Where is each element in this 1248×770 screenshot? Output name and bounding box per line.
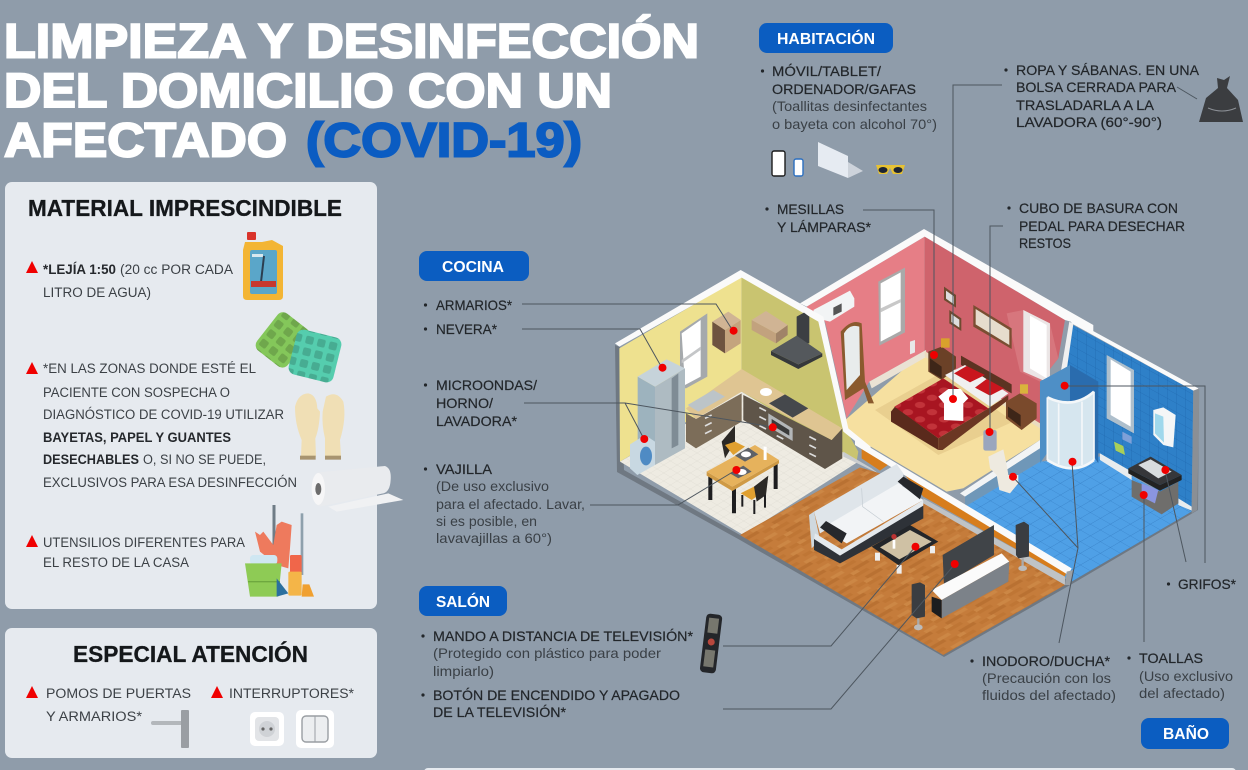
- text: móvil, tablet: MÓVIL/TABLET/: [772, 63, 881, 79]
- text: armarios y nevera: [424, 297, 513, 337]
- rug: [875, 372, 1013, 455]
- text: inodoro y ducha: [970, 653, 1116, 703]
- windows: [878, 268, 905, 346]
- title: LIMPIEZA Y DESINFECCIÓN: [4, 14, 699, 68]
- text: toallas: (Uso exclusivo: [1139, 668, 1233, 684]
- text: inodoro y ducha: (Precaución con los: [982, 670, 1111, 686]
- icon: cleaning kit: [245, 505, 314, 597]
- text: toallas: [1127, 650, 1233, 701]
- shower: [1040, 365, 1070, 463]
- text: cubo de basura: PEDAL PARA DESECHAR: [1019, 218, 1185, 234]
- room: kitchen: [615, 270, 871, 535]
- text: utensilios: UTENSILIOS DIFERENTES PARA: [43, 535, 245, 550]
- text: vajilla: VAJILLA: [436, 461, 493, 477]
- icon: devices: [772, 142, 905, 178]
- room: bedroom: [800, 229, 1093, 492]
- text: zonas del paciente: DIAGNÓSTICO DE COVID-19 UTILIZAR: [43, 407, 284, 422]
- panel: especial atención: [5, 628, 377, 758]
- text: lejía: LITRO DE AGUA): [43, 285, 151, 300]
- text: mando a distancia: limpiarlo): [433, 663, 494, 679]
- waste bin: [983, 430, 997, 451]
- title: [4, 14, 699, 168]
- text: ropa y sábanas: LAVADORA (60°-90°): [1016, 114, 1162, 130]
- text: zonas del paciente: BAYETAS, PAPEL Y GUANTES: [43, 430, 231, 445]
- text: microondas: [424, 377, 537, 429]
- lower panel edge: [424, 768, 1236, 770]
- wall cabinets: [712, 322, 725, 353]
- text: lejía: *LEJÍA 1:50: [43, 262, 116, 277]
- trim: [615, 270, 871, 453]
- text: pomos: [26, 686, 191, 724]
- text: móvil, tablet: ORDENADOR/GAFAS: [772, 81, 916, 97]
- section label: cocina: [419, 251, 529, 281]
- text: vajilla: lavavajillas a 60°): [436, 530, 552, 546]
- text: móvil, tablet: [761, 63, 937, 132]
- title: (COVID-19): [306, 114, 582, 168]
- text: utensilios: EL RESTO DE LA CASA: [43, 555, 189, 570]
- text: ropa y sábanas: ROPA Y SÁBANAS. EN UNA: [1016, 62, 1200, 78]
- text: microondas: HORNO/: [436, 395, 493, 411]
- back chair: [722, 426, 735, 458]
- panel: material imprescindible: [5, 182, 403, 609]
- text: microondas: LAVADORA*: [436, 413, 518, 429]
- icon: socket: [250, 712, 284, 746]
- section label: salón: [419, 586, 507, 616]
- text: vajilla: (De uso exclusivo: [436, 478, 549, 494]
- nightstand and lamp: [928, 347, 956, 380]
- heading: material imprescindible: MATERIAL IMPRESCINDIBLE: [28, 195, 342, 221]
- text: mando a distancia: [421, 628, 694, 679]
- cooker hood: [797, 313, 809, 343]
- pointer lines: [522, 85, 1205, 709]
- text: toallas: TOALLAS: [1139, 650, 1203, 666]
- text: botón de encendido: DE LA TELEVISIÓN*: [433, 704, 567, 720]
- text: lejía: (20 cc POR CADA: [120, 262, 233, 277]
- text: inodoro y ducha: INODORO/DUCHA*: [982, 653, 1111, 669]
- text: mesillas: [765, 201, 872, 235]
- second nightstand and lamp: [1006, 393, 1037, 430]
- text: vajilla: si es posible, en: [436, 513, 537, 529]
- section label: cocina: COCINA: [442, 259, 504, 276]
- section label: salón: SALÓN: [436, 593, 490, 611]
- text: móvil, tablet: (Toallitas desinfectantes: [772, 98, 927, 114]
- fridge: [638, 377, 655, 465]
- toilet: [988, 449, 1018, 493]
- sink unit: [1132, 480, 1178, 514]
- text: zonas del paciente: PACIENTE CON SOSPECHA O: [43, 385, 230, 400]
- mirror cabinet: [1153, 407, 1176, 447]
- text: cubo de basura: [1007, 200, 1185, 251]
- house illustration: [615, 229, 1199, 657]
- text: cubo de basura: CUBO DE BASURA CON: [1019, 200, 1178, 216]
- washing machine: [630, 435, 655, 475]
- text: móvil, tablet: o bayeta con alcohol 70°): [772, 116, 937, 132]
- text: ropa y sábanas: [1004, 62, 1200, 130]
- plug: [910, 340, 915, 354]
- title: AFECTADO: [4, 114, 287, 168]
- outer wall thickness: [615, 345, 1199, 657]
- text: ropa y sábanas: TRASLADARLA A LA: [1016, 97, 1155, 113]
- text: zonas del paciente: [26, 361, 297, 490]
- text: vajilla: para el afectado. Lavar,: [436, 496, 585, 512]
- window: [1107, 355, 1134, 433]
- top trim: [1070, 318, 1198, 394]
- text: lejía: [26, 261, 233, 300]
- counter and units: [686, 393, 742, 448]
- section label: baño: [1141, 718, 1229, 749]
- text: vajilla: [424, 461, 585, 546]
- room: living room: [740, 438, 1073, 655]
- text: pomos: Y ARMARIOS*: [46, 709, 143, 724]
- text: armarios y nevera: ARMARIOS*: [436, 297, 513, 313]
- text: grifos: GRIFOS*: [1178, 576, 1237, 592]
- room: bathroom: [960, 318, 1199, 582]
- section label: habitación: HABITACIÓN: [777, 30, 875, 48]
- icon: door handle: [151, 710, 189, 748]
- icon: paper roll: [312, 466, 403, 512]
- icon: light switch: [296, 710, 334, 748]
- sofa: [809, 464, 923, 563]
- text: microondas: MICROONDAS/: [436, 377, 537, 393]
- baseboards: [1100, 453, 1132, 480]
- text: interruptores: INTERRUPTORES*: [229, 686, 355, 701]
- icon: sponges: [253, 309, 343, 384]
- text: inodoro y ducha: fluidos del afectado): [982, 687, 1116, 703]
- text: toallas: del afectado): [1139, 685, 1225, 701]
- text: mesillas: MESILLAS: [777, 201, 844, 217]
- text: cubo de basura: RESTOS: [1019, 235, 1071, 251]
- pictures: [944, 287, 956, 308]
- text: botón de encendido: BOTÓN DE ENCENDIDO Y APAGADO: [433, 687, 680, 703]
- table: [710, 463, 776, 513]
- bed: [961, 356, 1012, 393]
- text: mando a distancia: MANDO A DISTANCIA DE TELEVISIÓN*: [433, 628, 694, 644]
- section label: habitación: [759, 23, 893, 53]
- title: DEL DOMICILIO CON UN: [4, 65, 612, 118]
- text: zonas del paciente: O, SI NO SE PUEDE,: [143, 452, 266, 467]
- text: mesillas: Y LÁMPARAS*: [777, 219, 872, 235]
- top trim: [800, 229, 1093, 332]
- text: mando a distancia: (Protegido con plástico para poder: [433, 645, 661, 661]
- coffee table: [872, 525, 938, 574]
- text: armarios y nevera: NEVERA*: [436, 321, 498, 337]
- heading: especial atención: ESPECIAL ATENCIÓN: [73, 640, 308, 667]
- window: [680, 313, 707, 388]
- text: zonas del paciente: DESECHABLES: [43, 452, 139, 467]
- mirror: [841, 322, 874, 403]
- icon: bleach bottle: [243, 232, 283, 300]
- icon: gloves: [295, 393, 344, 460]
- air conditioner: [813, 291, 854, 322]
- front chair: [741, 487, 763, 500]
- text: utensilios: [26, 535, 245, 570]
- half wall: [960, 440, 1040, 497]
- text: zonas del paciente: EXCLUSIVOS PARA ESA DESINFECCIÓN: [43, 475, 297, 490]
- t-shirt: [938, 389, 968, 421]
- towels on wall: [1114, 442, 1125, 455]
- icon: remote control: [700, 613, 723, 674]
- television and stand: [932, 525, 1009, 618]
- text: ropa y sábanas: BOLSA CERRADA PARA: [1016, 79, 1177, 95]
- speakers: [912, 522, 1029, 630]
- text: pomos: POMOS DE PUERTAS: [46, 686, 191, 701]
- red marker dots: [640, 327, 1169, 568]
- text: zonas del paciente: *EN LAS ZONAS DONDE ESTÉ EL: [43, 361, 256, 376]
- icon: rubbish bag: [1199, 76, 1243, 122]
- text: botón de encendido: [421, 687, 680, 720]
- section label: baño: BAÑO: [1163, 725, 1209, 743]
